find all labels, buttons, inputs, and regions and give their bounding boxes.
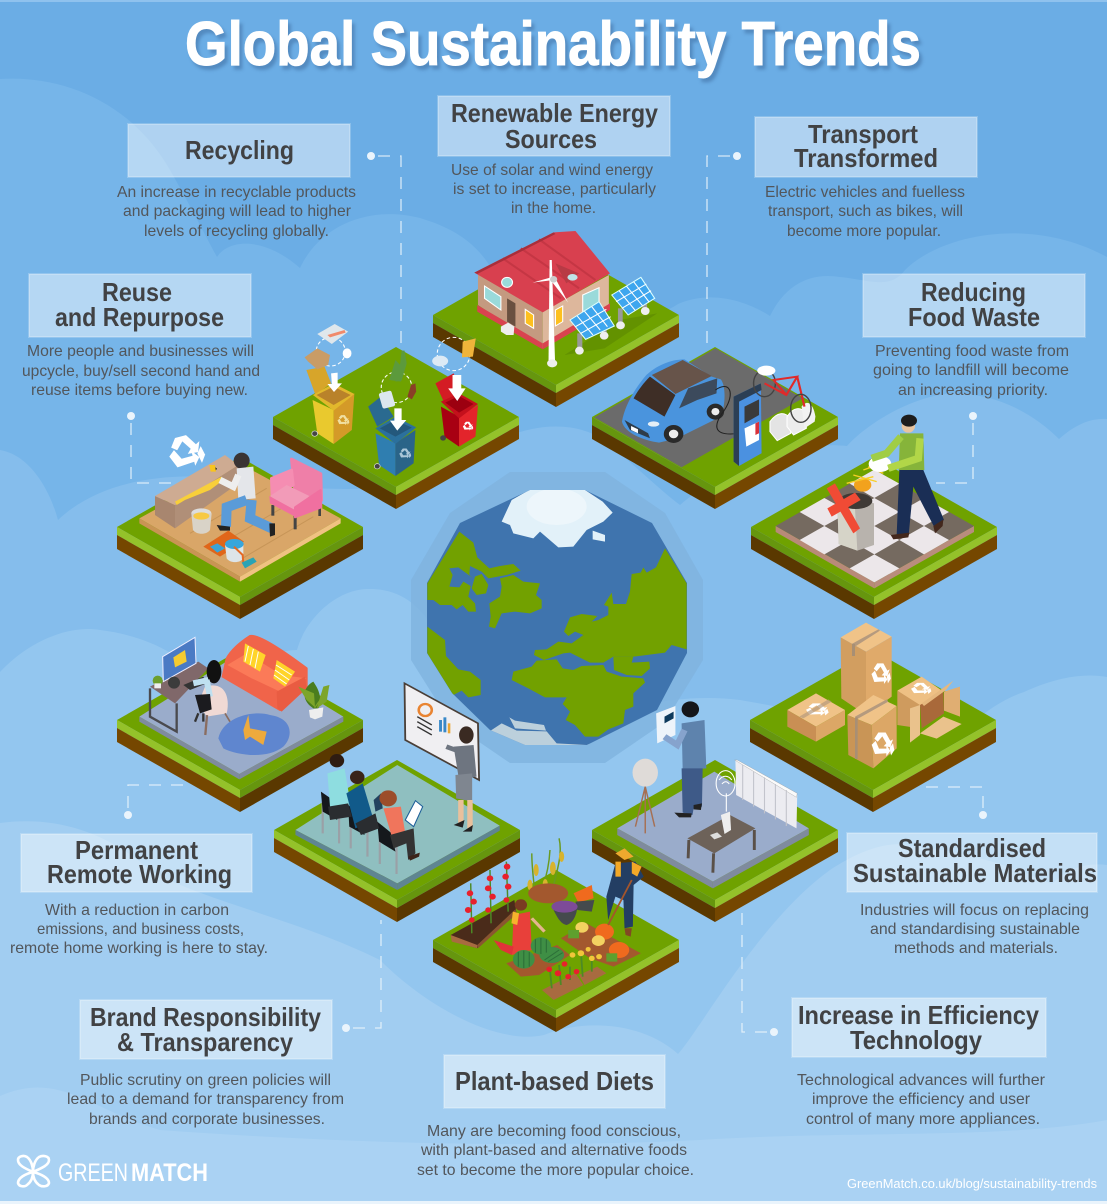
text: plant-based diets: set to become the more popular choice. [417, 1162, 694, 1179]
text: plant-based diets: with plant-based and alternative foods [420, 1142, 687, 1159]
text: transport: Transport [808, 119, 918, 149]
text: standardised materials [847, 833, 1097, 957]
text: plant-based diets: Many are becoming food conscious, [427, 1123, 681, 1140]
text: recycling: Recycling [185, 135, 294, 165]
text: renewable energy: is set to increase, particularly [453, 181, 656, 198]
logo: GreenMatch: MATCH [131, 1159, 208, 1187]
text: brand responsibility: lead to a demand for transparency from [67, 1091, 344, 1108]
text: plant-based diets [417, 1055, 694, 1179]
text: remote working: Remote Working [47, 859, 232, 889]
text: efficiency technology: improve the efficiency and user [812, 1091, 1031, 1108]
text: efficiency technology: Increase in Efficiency [798, 1000, 1039, 1030]
text: recycling: An increase in recyclable products [117, 184, 356, 201]
text: reducing food waste [863, 274, 1085, 399]
text: transport: Electric vehicles and fuelless [765, 184, 965, 201]
text: remote working [10, 834, 268, 957]
text: transport [755, 117, 977, 240]
text: brand responsibility: brands and corporate businesses. [89, 1111, 325, 1128]
text: reducing food waste: an increasing priority. [898, 382, 1048, 399]
text: reducing food waste: Reducing [921, 277, 1026, 307]
text: recycling: and packaging will lead to higher [123, 203, 352, 220]
text: efficiency technology: control of many more appliances. [806, 1111, 1040, 1128]
panel: reuse scene [117, 432, 363, 619]
text: remote working: With a reduction in carbon [45, 902, 229, 919]
text: transport: transport, such as bikes, will [768, 203, 963, 220]
text: reducing food waste: Preventing food waste from [875, 343, 1069, 360]
panel: renewable energy scene [433, 231, 679, 407]
text: recycling: levels of recycling globally. [144, 223, 329, 240]
text: recycling [117, 124, 356, 240]
text: renewable energy: in the home. [511, 200, 596, 217]
text: renewable energy: Sources [505, 124, 597, 154]
text: reuse [22, 274, 260, 399]
panel: permanent remote working scene [117, 636, 363, 812]
panel: brand responsibility scene [274, 683, 520, 922]
title: Global Sustainability Trends [185, 10, 921, 79]
source url: GreenMatch.co.uk/blog/sustainability-trends [847, 1177, 1097, 1191]
text: reuse: Reuse [102, 277, 172, 307]
panel: recycling scene [273, 324, 519, 509]
panel: transport scene [592, 347, 838, 509]
text: standardised materials: Industries will focus on replacing [860, 902, 1089, 919]
text: remote working: remote home working is here to stay. [10, 940, 268, 957]
text: reuse: More people and businesses will [27, 343, 254, 360]
text: efficiency technology: Technological advances will further [797, 1072, 1046, 1089]
logo: GreenMatch: GREEN [58, 1159, 128, 1187]
text: transport: become more popular. [787, 223, 941, 240]
text: brand responsibility: & Transparency [117, 1027, 293, 1057]
text: reuse: and Repurpose [55, 302, 224, 332]
globe [411, 472, 703, 763]
text: renewable energy: Renewable Energy [451, 98, 658, 128]
panel: plant-based diets scene [433, 838, 679, 1032]
text: brand responsibility: Brand Responsibility [90, 1002, 321, 1032]
text: efficiency technology: Technology [850, 1025, 982, 1055]
text: transport: Transformed [794, 143, 938, 173]
panel: sustainable materials scene [750, 623, 996, 812]
text: brand responsibility [67, 1000, 344, 1128]
text: remote working: Permanent [75, 835, 198, 865]
text: renewable energy: Use of solar and wind energy [451, 162, 653, 179]
panel: efficiency technology scene [592, 701, 838, 922]
text: standardised materials: and standardising sustainable [870, 921, 1080, 938]
text: plant-based diets: Plant-based Diets [455, 1066, 654, 1096]
dashed connectors [124, 152, 987, 1036]
text: remote working: emissions, and business costs, [37, 921, 244, 938]
text: reducing food waste: going to landfill will become [873, 362, 1069, 379]
logo: GreenMatch [18, 1156, 208, 1187]
text: standardised materials: methods and materials. [894, 940, 1058, 957]
text: brand responsibility: Public scrutiny on green policies will [80, 1072, 331, 1089]
text: reuse: upcycle, buy/sell second hand and [22, 363, 260, 380]
text: efficiency technology [792, 998, 1046, 1128]
text: standardised materials: Standardised [898, 833, 1046, 863]
panel: reducing food waste scene [751, 415, 997, 619]
text: reducing food waste: Food Waste [908, 302, 1040, 332]
text: renewable energy [438, 96, 670, 217]
text: reuse: reuse items before buying new. [31, 382, 248, 399]
